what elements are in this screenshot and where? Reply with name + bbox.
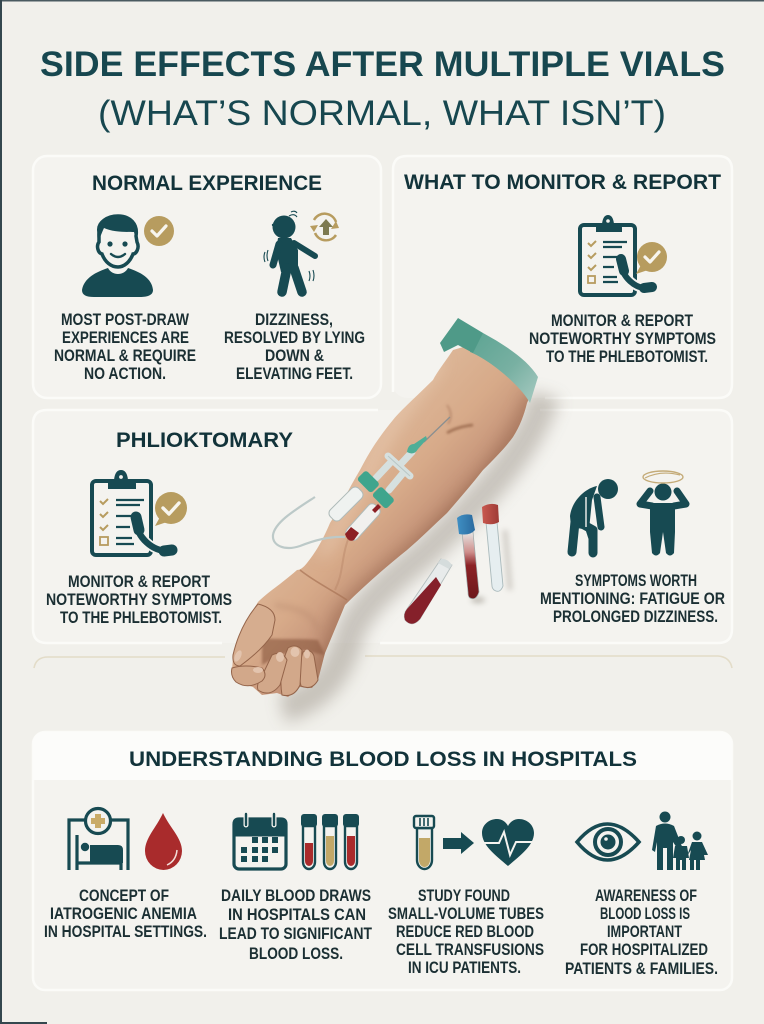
text: monitor and report, left <box>46 573 232 627</box>
title: (WHAT’S NORMAL, WHAT ISN’T) <box>98 94 666 133</box>
tube: lying tilted <box>404 559 452 624</box>
text: monitor and report, left: MONITOR & REPORT <box>68 573 210 591</box>
icon: clipboard with phone and check <box>580 215 667 295</box>
text: daily blood draws: LEAD TO SIGNIFICANT <box>219 925 372 943</box>
text: iatrogenic anemia: IN HOSPITAL SETTINGS. <box>44 923 207 941</box>
heading: what to monitor: WHAT TO MONITOR & REPORT <box>404 171 721 194</box>
text: awareness of blood loss <box>565 887 718 978</box>
heading: phliokotomary: PHLIOKTOMARY <box>116 429 293 452</box>
text: small-volume tubes <box>388 887 544 977</box>
icon: small tube, arrow, heart <box>414 816 534 869</box>
text: awareness of blood loss: FOR HOSPITALIZED <box>580 941 708 959</box>
text: most post-draw: NO ACTION. <box>84 365 166 383</box>
icon: clipboard with phone and check, left <box>92 470 187 555</box>
tube: red cap <box>505 530 510 590</box>
text: iatrogenic anemia: IATROGENIC ANEMIA <box>50 905 197 923</box>
text: awareness of blood loss: IMPORTANT <box>607 923 682 941</box>
panel: understanding blood loss <box>33 732 732 990</box>
text: monitor and report: NOTEWORTHY SYMPTOMS <box>529 330 716 348</box>
text: symptoms worth mentioning: PROLONGED DIZZINESS. <box>553 608 718 626</box>
text: monitor and report: MONITOR & REPORT <box>551 312 693 330</box>
text: dizziness: RESOLVED BY LYING <box>224 329 365 347</box>
tube: blue cap <box>471 597 485 603</box>
forearm and hand <box>232 345 535 697</box>
divider line <box>34 656 732 668</box>
text: daily blood draws <box>219 887 372 963</box>
text: small-volume tubes: STUDY FOUND <box>418 887 510 905</box>
text: monitor and report <box>529 312 716 366</box>
tube holder right with blood <box>344 502 382 542</box>
tubing <box>273 497 345 548</box>
icon: dizzy person with rotation arrows <box>264 211 339 292</box>
tube holder left <box>327 485 365 523</box>
arm shading <box>260 386 528 669</box>
icon: eye and family <box>577 812 708 870</box>
icon: smiling person with check <box>82 216 174 297</box>
fingers <box>232 604 318 696</box>
text: iatrogenic anemia: CONCEPT OF <box>79 887 169 905</box>
text: small-volume tubes: CELL TRANSFUSIONS <box>396 941 544 959</box>
text: daily blood draws: IN HOSPITALS CAN <box>228 906 366 924</box>
panel: phlebotomy <box>33 410 732 643</box>
text: dizziness: DOWN & <box>265 347 324 365</box>
text: most post-draw: EXPERIENCES ARE <box>62 329 189 347</box>
heading: normal experience: NORMAL EXPERIENCE <box>92 172 322 195</box>
text: most post-draw: NORMAL & REQUIRE <box>54 347 196 365</box>
text: symptoms worth mentioning <box>540 572 725 626</box>
arm shadow <box>282 395 545 708</box>
panel: what to monitor and report <box>393 156 732 398</box>
title <box>40 45 725 133</box>
text: symptoms worth mentioning: MENTIONING: FATIGUE OR <box>540 590 725 608</box>
header band <box>33 732 732 780</box>
needle and holder <box>273 417 450 548</box>
icon: fatigued and dizzy people <box>570 471 686 556</box>
text: awareness of blood loss: BLOOD LOSS IS <box>600 905 690 923</box>
panel: normal experience <box>33 156 381 398</box>
text: monitor and report: TO THE PHLEBOTOMIST. <box>546 348 708 366</box>
text: small-volume tubes: SMALL-VOLUME TUBES <box>388 905 544 923</box>
text: most post-draw: MOST POST-DRAW <box>61 311 189 329</box>
text: most post-draw <box>54 311 196 383</box>
heading: blood loss: UNDERSTANDING BLOOD LOSS IN HOSPITALS <box>129 748 637 771</box>
text: dizziness: DIZZINESS, <box>255 311 333 329</box>
text: iatrogenic anemia <box>44 887 207 941</box>
illustration: arm with blood draw and tubes <box>232 318 545 708</box>
tourniquet band <box>470 333 538 403</box>
text: awareness of blood loss: PATIENTS & FAMILIES. <box>565 960 718 978</box>
loose blood tubes <box>404 504 510 624</box>
text: symptoms worth mentioning: SYMPTOMS WORTH <box>575 572 697 590</box>
icon: calendar and blood tubes <box>234 814 359 869</box>
icon: hospital bed and blood drop <box>69 808 182 870</box>
text: monitor and report, left: TO THE PHLEBOTOMIST. <box>60 609 222 627</box>
title: SIDE EFFECTS AFTER MULTIPLE VIALS <box>40 45 725 84</box>
text: dizziness <box>224 311 365 383</box>
text: dizziness: ELEVATING FEET. <box>236 365 353 383</box>
text: small-volume tubes: REDUCE RED BLOOD <box>396 923 534 941</box>
text: small-volume tubes: IN ICU PATIENTS. <box>408 959 521 977</box>
text: monitor and report, left: NOTEWORTHY SYMPTOMS <box>46 591 232 609</box>
text: daily blood draws: DAILY BLOOD DRAWS <box>221 887 371 905</box>
text: daily blood draws: BLOOD LOSS. <box>249 945 343 963</box>
text: awareness of blood loss: AWARENESS OF <box>595 887 697 905</box>
